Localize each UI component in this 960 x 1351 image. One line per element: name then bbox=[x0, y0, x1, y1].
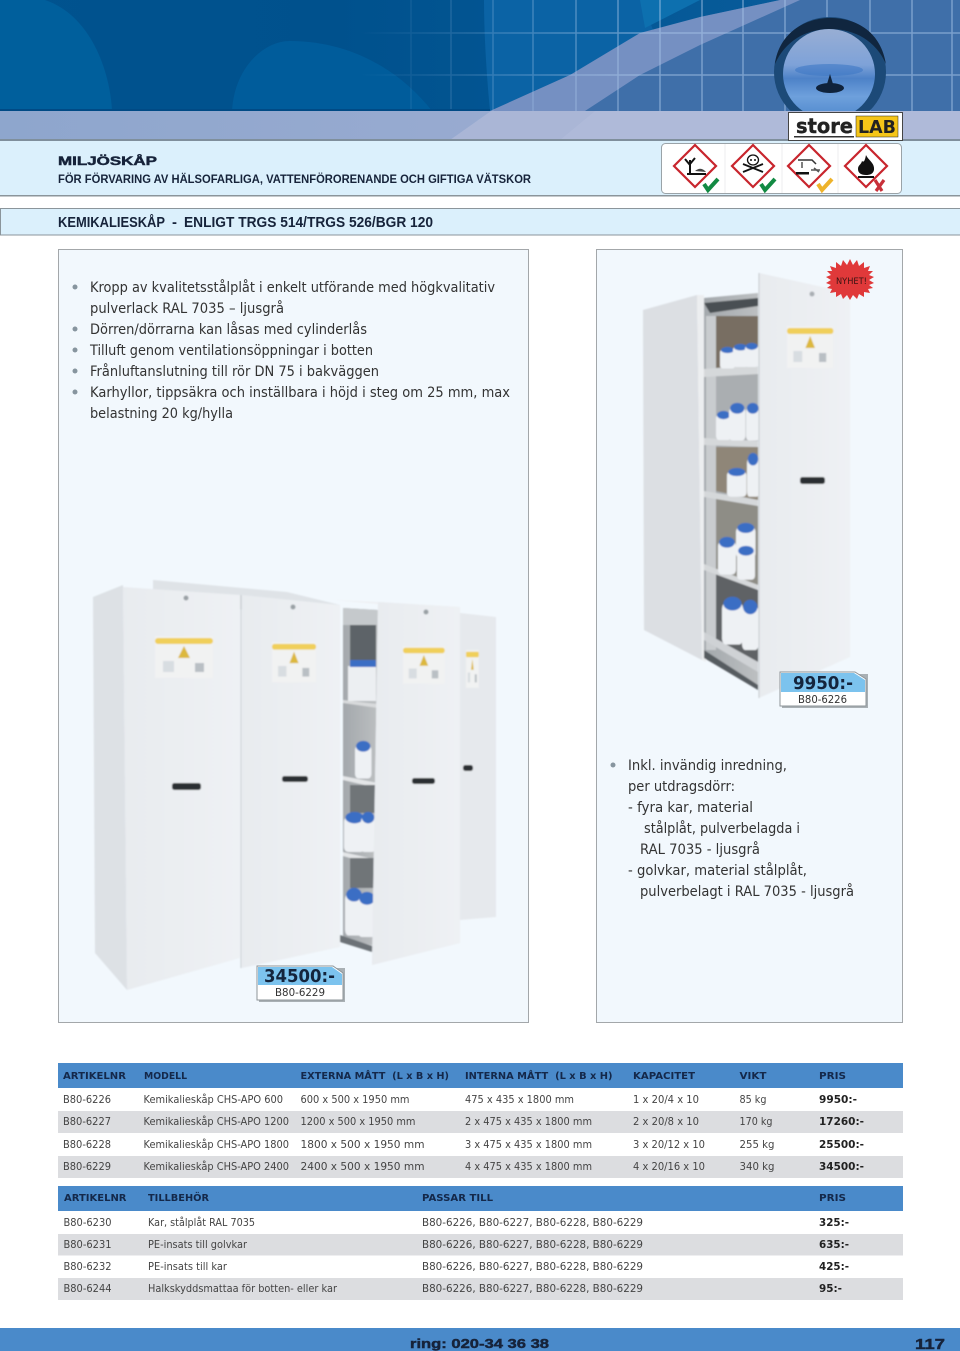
row B80-6226: B80-6226 bbox=[63, 1094, 111, 1106]
storeLAB logo bbox=[788, 112, 902, 140]
icon: green check bbox=[761, 179, 775, 190]
icon: yellow check bbox=[818, 179, 832, 190]
row B80-6226: 9950:- bbox=[819, 1094, 857, 1106]
row B80-6228: 3 x 20/12 x 10 bbox=[633, 1139, 705, 1151]
table header: VIKT bbox=[740, 1071, 767, 1082]
header banner bbox=[0, 0, 960, 141]
photo: pull-out cabinet bbox=[643, 273, 850, 698]
row B80-6227: B80-6227 bbox=[63, 1116, 111, 1128]
row B80-6244: B80-6244 bbox=[64, 1283, 112, 1295]
footer bbox=[0, 1328, 960, 1351]
feature list bbox=[72, 279, 510, 422]
product table bbox=[58, 1063, 903, 1178]
row B80-6231: B80-6226, B80-6227, B80-6228, B80-6229 bbox=[422, 1239, 643, 1251]
row B80-6227: 170 kg bbox=[740, 1116, 772, 1128]
row B80-6229: 4 x 475 x 435 x 1800 mm bbox=[465, 1161, 592, 1173]
icon: corrosive hazard bbox=[788, 145, 830, 187]
row B80-6229: 340 kg bbox=[740, 1161, 774, 1173]
row B80-6230: Kar, stålplåt RAL 7035 bbox=[148, 1216, 255, 1229]
row B80-6229: B80-6229 bbox=[63, 1161, 111, 1173]
interior equipment note: Inkl. invändig inredning, bbox=[628, 758, 787, 774]
storeLAB logo: LAB bbox=[858, 117, 896, 138]
row B80-6244: B80-6226, B80-6227, B80-6228, B80-6229 bbox=[422, 1283, 643, 1295]
row B80-6227: 2 x 20/8 x 10 bbox=[633, 1116, 699, 1128]
icon: toxic hazard bbox=[732, 145, 774, 187]
price tag: B80-6229: 34500:- bbox=[264, 966, 335, 987]
feature list: Kropp av kvalitetsstålplåt i enkelt utförande med högkvalitativ bbox=[90, 279, 495, 296]
table header: ARTIKELNR bbox=[64, 1193, 127, 1204]
row B80-6231: 635:- bbox=[819, 1239, 849, 1251]
row B80-6230 bbox=[64, 1216, 849, 1229]
row B80-6228 bbox=[63, 1138, 864, 1151]
interior equipment note: - golvkar, material stålplåt, bbox=[628, 862, 807, 879]
heading: category: MILJÖSKÅP bbox=[58, 153, 157, 168]
icon: green check bbox=[704, 179, 718, 190]
price tag: B80-6229 bbox=[257, 966, 345, 1002]
row B80-6232: B80-6226, B80-6227, B80-6228, B80-6229 bbox=[422, 1261, 643, 1273]
row B80-6226: 85 kg bbox=[740, 1094, 766, 1106]
row B80-6232: PE-insats till kar bbox=[148, 1261, 228, 1273]
row B80-6227 bbox=[58, 1111, 903, 1133]
icon: water drop sphere bbox=[774, 17, 886, 111]
row B80-6226: 600 x 500 x 1950 mm bbox=[300, 1094, 410, 1106]
interior equipment note bbox=[610, 758, 854, 900]
row B80-6226: 475 x 435 x 1800 mm bbox=[465, 1094, 574, 1106]
badge: new: NYHET! bbox=[836, 277, 867, 287]
row B80-6231 bbox=[58, 1234, 903, 1256]
row B80-6231: PE-insats till golvkar bbox=[148, 1239, 248, 1251]
row B80-6227: Kemikalieskåp CHS-APO 1200 bbox=[144, 1115, 289, 1128]
row B80-6230: B80-6230 bbox=[64, 1217, 112, 1229]
row B80-6232 bbox=[64, 1261, 849, 1273]
row B80-6229: 2400 x 500 x 1950 mm bbox=[300, 1161, 424, 1173]
row B80-6226 bbox=[63, 1093, 857, 1106]
door labels and handles bbox=[155, 636, 213, 678]
hazard symbols panel bbox=[662, 144, 902, 194]
icon: environmental hazard bbox=[674, 145, 716, 187]
subheading: FÖR FÖRVARING AV HÄLSOFARLIGA, VATTENFÖRORENANDE OCH GIFTIGA VÄTSKOR bbox=[58, 171, 531, 186]
row B80-6244 bbox=[58, 1278, 903, 1300]
feature list: belastning 20 kg/hylla bbox=[90, 406, 233, 422]
row B80-6226: Kemikalieskåp CHS-APO 600 bbox=[144, 1093, 283, 1106]
row B80-6232: B80-6232 bbox=[64, 1261, 112, 1273]
table header: ARTIKELNR bbox=[63, 1071, 126, 1082]
row B80-6227: 2 x 475 x 435 x 1800 mm bbox=[465, 1116, 592, 1128]
row B80-6229 bbox=[58, 1156, 903, 1178]
table header: PRIS bbox=[819, 1193, 846, 1204]
table header: PRIS bbox=[819, 1071, 846, 1082]
icon: red cross bbox=[875, 180, 884, 191]
title band: - bbox=[172, 215, 177, 231]
row B80-6228: 25500:- bbox=[819, 1139, 864, 1151]
table header: EXTERNA MÅTT (L x B x H) bbox=[300, 1069, 449, 1082]
interior equipment note: per utdragsdörr: bbox=[628, 779, 735, 795]
row B80-6229: Kemikalieskåp CHS-APO 2400 bbox=[144, 1160, 289, 1173]
row B80-6232: 425:- bbox=[819, 1261, 849, 1273]
table header: TILLBEHÖR bbox=[148, 1190, 209, 1204]
feature list: Tilluft genom ventilationsöppningar i botten bbox=[89, 343, 373, 359]
section header band bbox=[0, 141, 960, 196]
title band: KEMIKALIESKÅP bbox=[58, 214, 165, 231]
accessories table bbox=[58, 1186, 903, 1300]
interior equipment note: - fyra kar, material bbox=[628, 800, 753, 816]
table header bbox=[58, 1186, 903, 1211]
price tag: B80-6226: B80-6226 bbox=[798, 694, 847, 706]
icon: flammable hazard bbox=[845, 145, 887, 187]
table header: KAPACITET bbox=[633, 1071, 695, 1082]
row B80-6228: 3 x 475 x 435 x 1800 mm bbox=[465, 1139, 592, 1151]
interior equipment note: stålplåt, pulverbelagda i bbox=[644, 820, 800, 837]
row B80-6244: 95:- bbox=[819, 1283, 842, 1295]
table header: PASSAR TILL bbox=[422, 1193, 494, 1204]
title band bbox=[0, 208, 960, 235]
row B80-6226: 1 x 20/4 x 10 bbox=[633, 1094, 699, 1106]
phone number: ring: 020-34 36 38 bbox=[410, 1336, 549, 1351]
feature list: Dörren/dörrarna kan låsas med cylinderlås bbox=[90, 321, 367, 338]
table header bbox=[58, 1063, 903, 1088]
title band: ENLIGT TRGS 514/TRGS 526/BGR 120 bbox=[184, 215, 433, 231]
row B80-6228: 1800 x 500 x 1950 mm bbox=[300, 1139, 424, 1151]
storeLAB logo: store bbox=[796, 114, 853, 138]
interior equipment note: pulverbelagt i RAL 7035 - ljusgrå bbox=[640, 883, 854, 900]
price tag: B80-6226: 9950:- bbox=[793, 673, 853, 694]
badge: new bbox=[826, 259, 874, 300]
price tag: B80-6226 bbox=[780, 672, 868, 708]
row B80-6244: Halkskyddsmattaa för botten- eller kar bbox=[148, 1283, 338, 1295]
table header: INTERNA MÅTT (L x B x H) bbox=[465, 1069, 612, 1082]
panel: cabinet B80-6226 bbox=[596, 250, 902, 1022]
row B80-6230: B80-6226, B80-6227, B80-6228, B80-6229 bbox=[422, 1217, 643, 1229]
row B80-6229: 4 x 20/16 x 10 bbox=[633, 1161, 705, 1173]
photo: four-door cabinet bbox=[93, 580, 496, 990]
feature list: pulverlack RAL 7035 – ljusgrå bbox=[90, 300, 284, 317]
interior equipment note: RAL 7035 - ljusgrå bbox=[640, 841, 760, 858]
row B80-6228: 255 kg bbox=[740, 1139, 774, 1151]
price tag: B80-6229: B80-6229 bbox=[275, 987, 325, 999]
panel: features and cabinet B80-6229 bbox=[58, 250, 528, 1022]
row B80-6228: Kemikalieskåp CHS-APO 1800 bbox=[144, 1138, 289, 1151]
row B80-6228: B80-6228 bbox=[63, 1139, 111, 1151]
row B80-6231: B80-6231 bbox=[64, 1239, 112, 1251]
row B80-6227: 1200 x 500 x 1950 mm bbox=[300, 1116, 416, 1128]
feature list: Frånluftanslutning till rör DN 75 i bakväggen bbox=[90, 363, 379, 380]
row B80-6227: 17260:- bbox=[819, 1116, 864, 1128]
row B80-6229: 34500:- bbox=[819, 1161, 864, 1173]
row B80-6230: 325:- bbox=[819, 1217, 849, 1229]
table header: MODELL bbox=[144, 1071, 188, 1082]
feature list: Karhyllor, tippsäkra och inställbara i höjd i steg om 25 mm, max bbox=[90, 385, 510, 401]
